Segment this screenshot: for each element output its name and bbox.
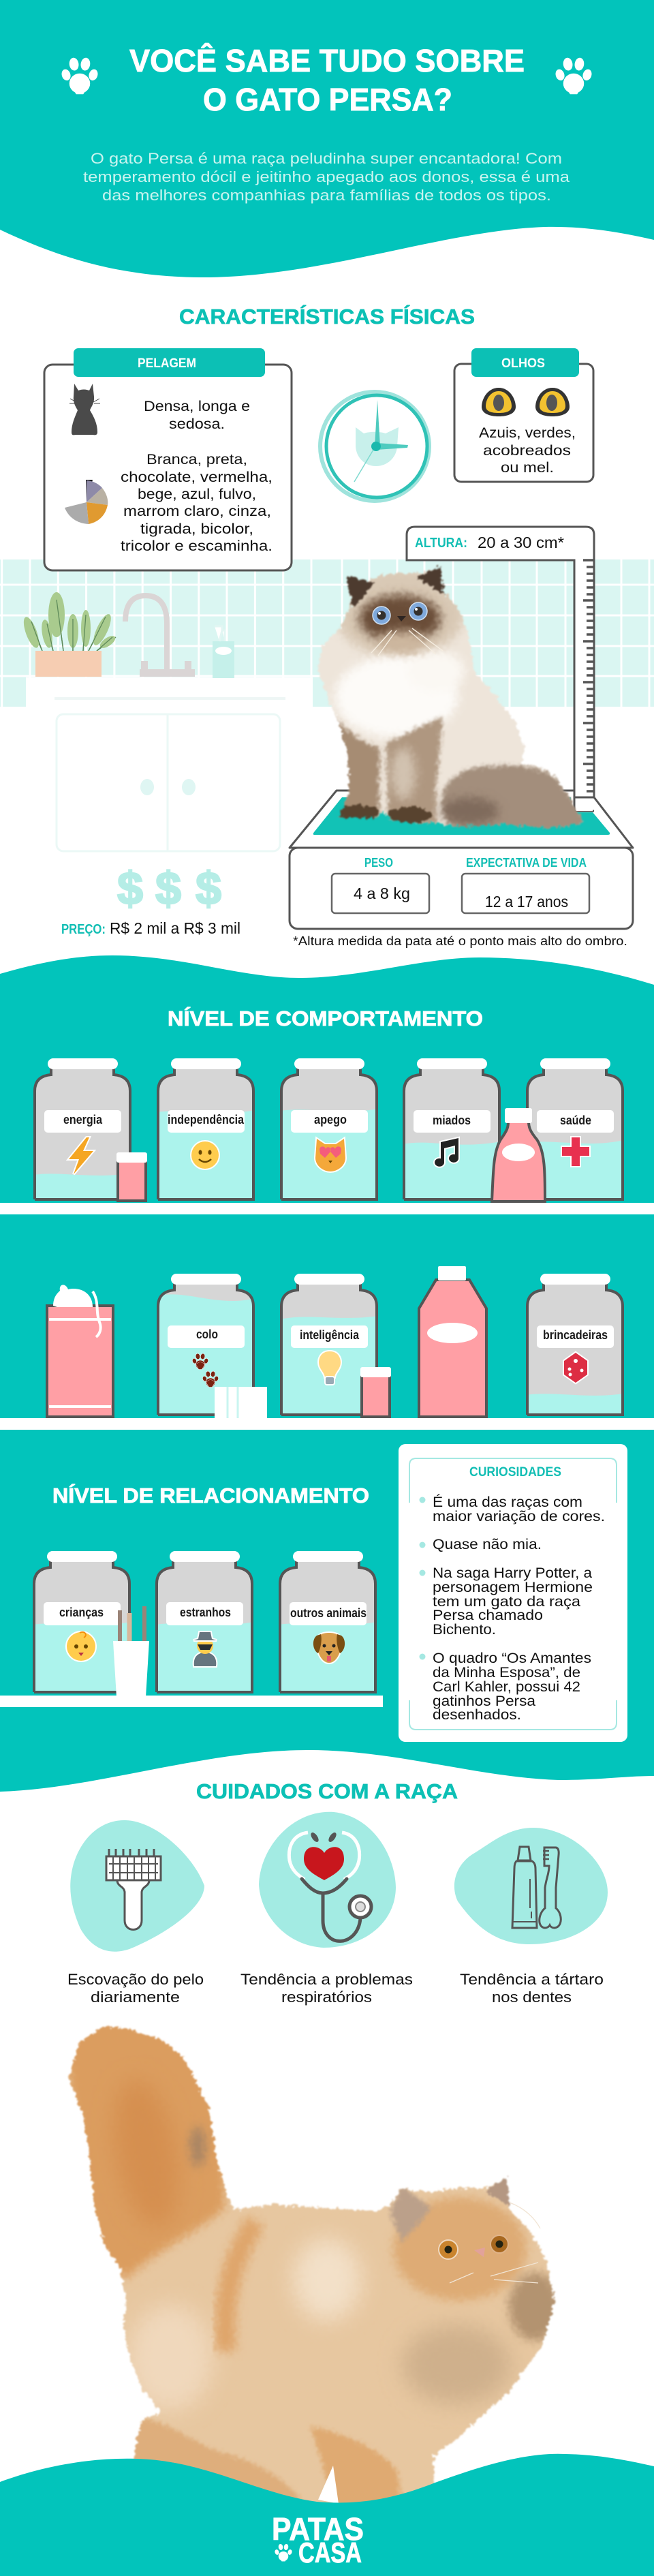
icon: light bulb [319,1351,341,1384]
body stripe [225,2222,255,2351]
jar: estranhos [155,1551,253,1694]
pink bottle [492,1108,545,1201]
heading: cuidados com a raça: CUIDADOS COM A RAÇA [196,1779,458,1803]
jar: apego [280,1058,378,1201]
sink cabinet [54,699,285,851]
bathroom tile wall [0,559,654,707]
curiosidades text: da Minha Esposa”, de [433,1665,580,1681]
care: brushing [67,1820,204,2006]
cat tail [441,765,586,832]
curiosidades text: É uma das raças com [433,1494,582,1510]
cat head tone [336,568,464,658]
icon: dog [313,1633,345,1663]
cat chest [335,656,458,737]
shelf 2 [0,1418,654,1430]
olhos tab: OLHOS [501,356,545,371]
expectativa de vida: 12 a 17 anos [485,893,568,910]
icon: dollar signs: $ [196,863,221,915]
curiosidades text: desenhados. [433,1707,521,1723]
pencil cup [113,1606,149,1697]
text: Tendência a problemas [240,1971,413,1988]
icon: dice [564,1353,587,1383]
cat base coat [317,571,585,829]
scale mat [313,797,610,835]
jar: inteligência [280,1274,378,1417]
jar: saúde [526,1058,624,1201]
altura label: 20 a 30 cm* [478,534,564,551]
footer wave [0,2454,654,2576]
icon: eyes [482,388,570,416]
jar: colo [157,1274,255,1417]
curiosidades text [433,1494,605,1723]
body light patch left [128,2305,213,2411]
soap bottle [213,626,234,678]
small pink jar [116,1152,147,1201]
peso: 4 a 8 kg [354,885,410,902]
counter top [26,677,313,711]
olhos tab [471,348,579,377]
icon: smiley [191,1141,219,1169]
altura label [415,534,564,551]
expectativa de vida [462,856,589,913]
pelagem tab [74,348,265,377]
jar: outros animais [279,1551,377,1694]
icon: left paw [60,57,99,94]
heading: nível de relacionamento: NÍVEL DE RELACIONAMENTO [52,1484,369,1507]
intro text: temperamento dócil e jeitinho apegado aos donos, essa é uma [83,168,570,185]
curiosidades text: Bichento. [433,1622,496,1638]
faucet [125,596,195,677]
jar: energia [33,1058,131,1201]
olhos text: Azuis, verdes, [479,425,576,441]
logo: PATAS [272,2511,364,2547]
jar: independência: independência [168,1113,245,1126]
rear leg [129,2419,313,2515]
icon: dollar signs [117,863,221,915]
plant [20,592,117,677]
panel: olhos [454,348,593,482]
title: VOCÊ SABE TUDO SOBRE [129,43,525,78]
small pink jar [360,1367,391,1417]
pelagem text: sedosa. [169,416,225,432]
icon: red cross [562,1137,589,1166]
teal section background [0,955,654,1792]
head [393,2197,527,2301]
chest shade [402,2325,511,2404]
text: Escovação do pelo [67,1971,204,1988]
curiosidades text: Carl Kahler, possui 42 [433,1679,580,1695]
icon: stethoscope [289,1831,371,1941]
pelagem text: tigrada, bicolor, [140,521,253,537]
panel: curiosidades [399,1444,627,1742]
curiosidades text: Quase não mia. [433,1537,542,1552]
heading: características físicas: CARACTERÍSTICAS FÍSICAS [179,305,475,328]
persian cat seated [317,564,585,830]
cat eyes [439,2235,508,2259]
curiosidades text: tem um gato da raça [433,1594,580,1610]
cat tail shade [441,797,499,825]
cat chest top [416,646,467,684]
icon: colour pie [65,480,108,524]
scale info box [290,848,633,929]
pelagem tab: PELAGEM [138,356,196,371]
logo [272,2511,364,2569]
pelagem text: bege, azul, fulvo, [138,487,256,502]
icon: cat with heart eyes [315,1139,345,1171]
logo paw [274,2544,293,2561]
bullets [420,1497,425,1660]
jar: energia: energia [63,1113,103,1126]
olhos text: acobreados [483,443,571,459]
large pink bottle [419,1266,486,1417]
height ruler [407,527,594,811]
blob [259,1812,396,1948]
pelagem text: chocolate, vermelha, [121,470,272,485]
panel: pelagem [44,348,292,570]
olhos text [479,425,576,476]
intro text: das melhores companhias para famílias de todos os tipos. [102,187,551,204]
front leg [310,2426,402,2515]
orange persian cat [61,2017,565,2521]
mouse [53,1285,101,1337]
text: diariamente [91,1989,180,2006]
care: tartar [454,1828,608,2006]
header wave background [0,0,654,277]
clock [320,392,429,501]
icon: music note [435,1138,458,1167]
icon: right paw [554,57,593,94]
jar: brincadeiras [526,1274,624,1417]
tail [61,2017,225,2280]
jar: outros animais: outros animais [290,1606,367,1620]
jar: inteligência: inteligência [300,1328,360,1342]
logo: CASA [298,2536,362,2569]
footnote: *Altura medida da pata até o ponto mais alto do ombro. [293,934,627,948]
curiosidades text: Persa chamado [433,1608,543,1623]
jar: crianças: crianças [59,1606,104,1619]
icon: lightning [69,1137,93,1174]
pelagem text: Densa, longa e [144,399,250,414]
blob [70,1820,204,1952]
heading: nível de comportamento: NÍVEL DE COMPORTAMENTO [168,1007,483,1030]
text [67,1971,204,2006]
olhos text: ou mel. [501,460,554,476]
curiosidades text: maior variação de cores. [433,1509,605,1524]
cat whiskers [371,628,443,656]
icon: spy [193,1632,217,1666]
intro text: O gato Persa é uma raça peludinha super encantadora! Com [91,150,562,167]
expectativa de vida: EXPECTATIVA DE VIDA [466,856,587,870]
gap between legs [318,2466,339,2504]
jar: brincadeiras: brincadeiras [543,1328,608,1342]
cat muzzle [377,631,426,653]
curiosidades text: gatinhos Persa [433,1693,535,1709]
body light patch centre [293,2239,361,2320]
cat right leg [386,717,443,825]
pelagem text: tricolor e escaminha. [121,538,272,554]
title [129,43,525,117]
blob [454,1828,608,1944]
jar: independência [157,1058,255,1201]
icon: baby [67,1632,95,1661]
pelagem text [121,399,272,554]
altura label: ALTURA: [415,536,467,551]
cat base coat [68,2059,555,2502]
pink box with mouse [47,1285,113,1417]
jar: crianças [33,1551,131,1694]
shelf 1 [0,1203,654,1214]
text [240,1971,413,2006]
text: respiratórios [281,1989,372,2006]
tail centre [104,2074,189,2233]
peso [332,856,429,913]
scale platform [290,789,633,848]
jar: colo: colo [196,1328,218,1341]
head right shade [509,2273,561,2341]
ruler ticks [583,560,594,805]
icon: toothpaste and brush [512,1847,561,1928]
jar: apego: apego [314,1113,347,1126]
price: PREÇO: [61,922,106,937]
jar: miados: miados [433,1114,471,1127]
curiosidades text: personagem Hermione [433,1580,593,1595]
icon: dollar signs: $ [117,863,143,915]
shelf 3 [0,1696,383,1707]
cat paws [337,805,379,820]
icon: brush [106,1849,161,1930]
text: nos dentes [492,1989,572,2006]
cat eyes [373,602,427,624]
peso: PESO [364,856,393,870]
curiosidades text: Na saga Harry Potter, a [433,1565,592,1581]
cat left leg [334,717,379,821]
title: O GATO PERSA? [203,82,452,117]
intro text [83,150,570,204]
jar: miados [403,1058,501,1201]
icon: cat silhouette [69,384,100,435]
icon: dollar signs: $ [155,863,181,915]
pelagem text: Branca, preta, [146,452,247,467]
curiosidades text: O quadro “Os Amantes [433,1651,591,1666]
whiskers [450,2203,540,2283]
icon: paw prints [192,1353,219,1387]
cat ears [344,572,375,608]
price: R$ 2 mil a R$ 3 mil [110,919,240,937]
jar: saúde: saúde [560,1114,591,1127]
cat leg highlight [391,748,416,799]
left ear [390,2186,432,2242]
cat face mask [359,595,441,643]
books [215,1387,267,1418]
jar: estranhos: estranhos [180,1606,231,1619]
text: Tendência a tártaro [460,1971,604,1988]
tail dark streak [189,2126,206,2167]
curiosidades title: CURIOSIDADES [469,1465,561,1479]
pelagem text: marrom claro, cinza, [123,504,271,519]
right ear [485,2175,510,2207]
text [460,1971,604,2006]
care: respiratory [240,1812,413,2006]
